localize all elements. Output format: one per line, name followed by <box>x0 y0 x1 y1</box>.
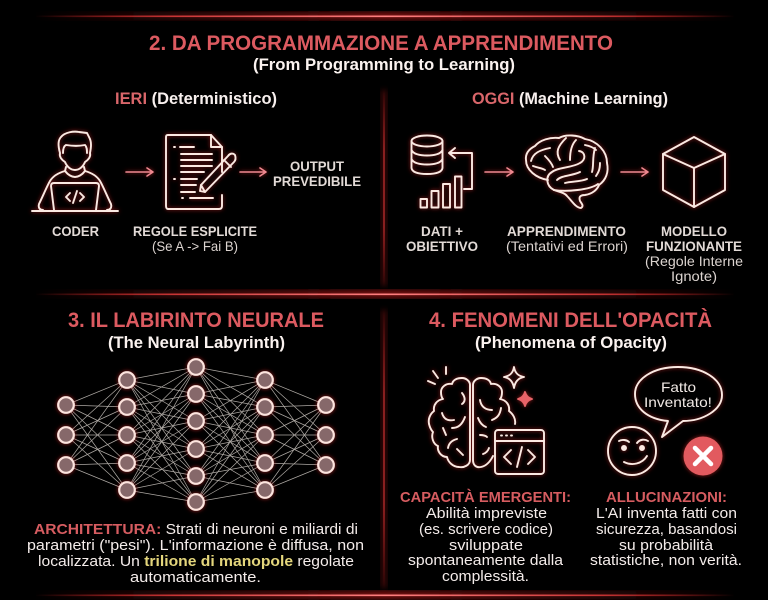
upper vertical divider <box>381 90 387 286</box>
label: prevedibile: PREVEDIBILE <box>273 173 361 189</box>
panel: phenomena of opacity <box>400 309 742 585</box>
architecture description: ARCHITETTURA: Strati di neuroni e miliardi di <box>34 521 358 538</box>
hallucinations text <box>590 489 742 569</box>
top divider <box>35 12 735 20</box>
heading: OGGI: OGGI (Machine Learning) <box>472 89 668 108</box>
arrow: coder to rules <box>126 168 153 176</box>
note: if A then B: (Se A -> Fai B) <box>152 238 238 254</box>
label: learning: APPRENDIMENTO <box>507 223 626 239</box>
bottom divider <box>35 591 735 599</box>
hallucinations text: L'AI inventa fatti con <box>596 505 737 522</box>
section 2 subtitle: (From Programming to Learning) <box>253 55 515 74</box>
bubble text: inventato: Inventato! <box>644 394 712 410</box>
label: coder: CODER <box>52 223 99 239</box>
lower vertical divider <box>381 310 387 588</box>
emergent capabilities text: sviluppate <box>449 537 523 554</box>
section 3 subtitle: (The Neural Labyrinth) <box>108 333 285 352</box>
architecture description <box>27 521 364 586</box>
label: working: FUNZIONANTE <box>646 238 742 254</box>
section 3 heading: 3. IL LABIRINTO NEURALE <box>68 309 324 332</box>
hallucinations text: sicurezza, basandosi <box>596 521 737 538</box>
hallucinations text: statistiche, non verità. <box>590 552 742 569</box>
section 4 heading: 4. FENOMENI DELL'OPACITÀ <box>429 309 712 332</box>
panel: from programming to learning <box>32 32 743 284</box>
icon: brain side view <box>526 135 608 208</box>
bubble text: fatto: Fatto <box>661 379 696 395</box>
icon: red cross <box>684 436 722 476</box>
label: objective: OBIETTIVO <box>406 238 478 254</box>
label: data and goal: DATI + <box>421 223 463 239</box>
arrow: learning to model <box>621 168 648 176</box>
hallucinations text: ALLUCINAZIONI: <box>606 489 727 506</box>
icon: cube <box>663 137 725 207</box>
architecture description: parametri ("pesi"). L'informazione è diffusa, non <box>27 537 364 554</box>
icon: database and bars <box>412 136 472 208</box>
emergent capabilities text: Abilità impreviste <box>426 505 547 522</box>
heading: IERI: IERI (Deterministico) <box>115 89 277 108</box>
icon: document with pencil <box>166 135 236 209</box>
label: output: OUTPUT <box>290 158 344 174</box>
architecture description: localizzata. Un trilione di manopole regolate <box>38 553 354 570</box>
note: trial and error: (Tentativi ed Errori) <box>506 238 628 254</box>
emergent capabilities text <box>400 489 571 585</box>
middle divider <box>35 290 735 298</box>
label: explicit rules: REGOLE ESPLICITE <box>133 223 257 239</box>
architecture description: automaticamente. <box>130 569 261 586</box>
hallucinations text: su probabilità <box>619 537 714 554</box>
panel: neural labyrinth <box>27 309 364 586</box>
note: internal rules: (Regole Interne <box>645 253 743 269</box>
emergent capabilities text: (es. scrivere codice) <box>419 521 553 538</box>
neural network diagram <box>58 359 334 510</box>
emergent capabilities text: CAPACITÀ EMERGENTI: <box>400 489 571 506</box>
icon: smirking face <box>608 427 656 475</box>
emergent capabilities text: complessità. <box>442 568 529 585</box>
icon: brain with code window <box>428 367 544 474</box>
label: model: MODELLO <box>661 223 727 239</box>
section 4 subtitle: (Phenomena of Opacity) <box>475 333 667 352</box>
emergent capabilities text: spontaneamente dalla <box>408 552 564 569</box>
icon: speech bubble <box>635 367 722 437</box>
note: unknown: Ignote) <box>671 268 717 284</box>
arrow: rules to output <box>240 168 266 176</box>
section 2 heading: 2. DA PROGRAMMAZIONE A APPRENDIMENTO <box>149 32 613 55</box>
arrow: data to learning <box>485 168 513 176</box>
icon: coder with laptop <box>32 132 118 211</box>
